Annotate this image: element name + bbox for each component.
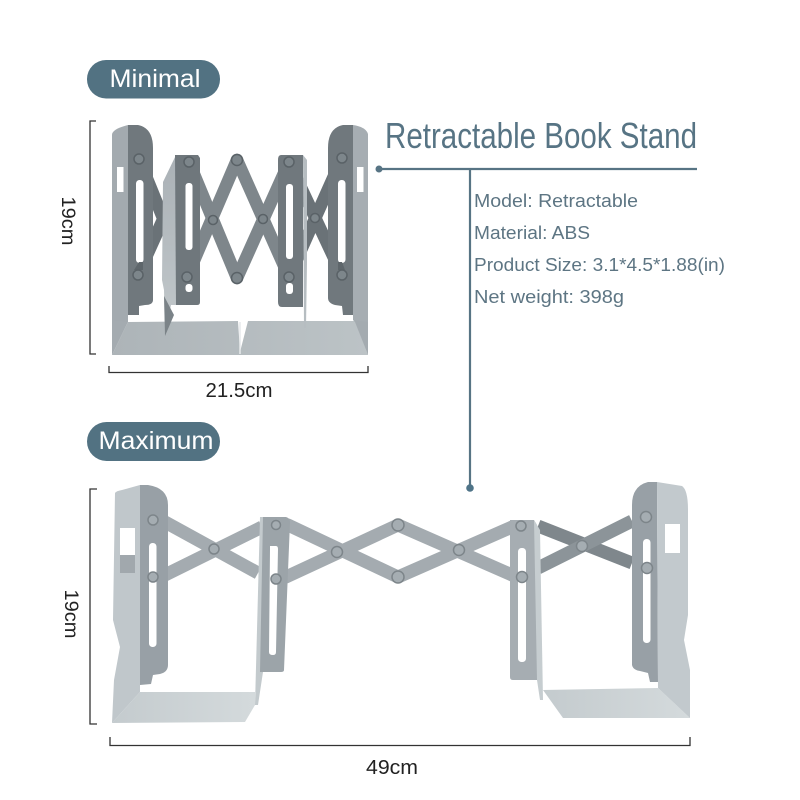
maximum stand: left floor and flap (112, 517, 263, 723)
dimension: maximum width (110, 737, 690, 779)
dimension: maximum width: 49cm (366, 757, 418, 779)
minimal stand: rivets (133, 153, 347, 284)
specifications text: Product Size: 3.1*4.5*1.88(in) (474, 255, 725, 275)
minimal stand: left inner plate (162, 155, 200, 336)
maximum stand: right inner plate (510, 520, 543, 700)
maximum stand: left end plate (112, 485, 168, 723)
dimension: maximum height (60, 489, 97, 724)
minimal stand: scissor arms (138, 158, 342, 278)
dimension: minimal height: 19cm (57, 196, 78, 246)
dimension: minimal width (109, 366, 368, 402)
maximum stand: right end plate (632, 482, 690, 718)
specifications text: Net weight: 398g (474, 287, 624, 307)
minimal stand: right end plate (328, 125, 368, 322)
title: Retractable Book Stand (385, 115, 697, 156)
maximum stand: rivets (148, 512, 652, 584)
product photo: maximum book stand (112, 482, 690, 723)
badge: Minimal: Minimal (110, 65, 200, 93)
dimension: minimal height (57, 121, 96, 354)
dimension: minimal width: 21.5cm (206, 380, 272, 402)
minimal stand: floor (112, 320, 368, 355)
connector: horizontal and vertical line with dots (376, 166, 697, 492)
dimension: maximum height: 19cm (60, 590, 81, 638)
maximum stand: right floor (543, 688, 690, 718)
maximum stand: scissor arms (165, 521, 632, 577)
maximum stand: left inner plate (260, 517, 290, 672)
specifications text (474, 191, 725, 307)
specifications text: Material: ABS (474, 223, 590, 243)
badge: Maximum (87, 422, 220, 461)
product photo: minimal book stand (112, 125, 368, 355)
minimal stand: right inner plate (278, 155, 307, 328)
minimal stand: left end plate (112, 125, 153, 322)
badge: Maximum: Maximum (98, 427, 214, 455)
badge: Minimal (87, 60, 220, 98)
specifications text: Model: Retractable (474, 191, 638, 211)
